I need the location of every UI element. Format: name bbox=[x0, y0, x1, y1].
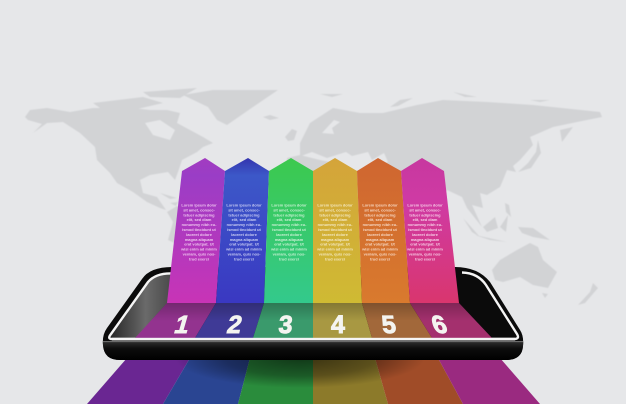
arrow 2 text: elit, sed diam bbox=[232, 217, 257, 222]
panel 4 bbox=[313, 303, 372, 338]
stripe 6 bbox=[438, 358, 540, 404]
number 4: 4 bbox=[331, 311, 345, 339]
panel 3 bbox=[253, 303, 313, 338]
arrow 3 text: veniam, quis nos- bbox=[273, 252, 306, 256]
southeast asia islands bbox=[463, 203, 550, 242]
arrow 1 text: laoreet dolore bbox=[186, 232, 213, 237]
arrow 1 text: tetuer adipiscing bbox=[183, 212, 215, 217]
stripe 1 bbox=[87, 358, 190, 404]
phone shadow on stripes bbox=[175, 328, 425, 388]
arrow 1 bbox=[167, 158, 225, 303]
stripe 3 bbox=[238, 358, 313, 404]
arrow 4 text: Lorem ipsum dolor bbox=[317, 202, 353, 208]
arrow 1 text: wisi enim ad minim bbox=[180, 247, 217, 252]
panel 1 bbox=[135, 303, 216, 338]
arrow 4 text: wisi enim ad minim bbox=[316, 247, 353, 252]
arrow 6 text: sit amet, consec- bbox=[409, 207, 441, 212]
arrow 1 text: ismod tincidunt ut bbox=[182, 227, 217, 232]
arrow 2 text: laoreet dolore bbox=[231, 232, 258, 237]
arrow 5 text: ismod tincidunt ut bbox=[363, 227, 398, 232]
arrow 1 text: veniam, quis nos- bbox=[183, 252, 216, 256]
kamchatka bbox=[560, 127, 573, 142]
smartphone bbox=[100, 267, 526, 360]
arrow 5 bbox=[357, 158, 410, 303]
panel top shading bbox=[150, 303, 476, 321]
left screen area bbox=[108, 273, 171, 338]
arrow 5 text: veniam, quis nos- bbox=[364, 252, 397, 256]
arrow 3 bbox=[264, 158, 313, 303]
phone body bbox=[103, 267, 523, 360]
arrow 3 text: laoreet dolore bbox=[276, 232, 303, 237]
arrow 3 text: trud exerci bbox=[279, 256, 299, 261]
eurasia bbox=[300, 100, 602, 227]
colored floor stripes bbox=[87, 328, 540, 404]
number 5: 5 bbox=[380, 311, 398, 339]
arrow 4 text: ismod tincidunt ut bbox=[318, 227, 353, 232]
arrow 1 text: Lorem ipsum dolor bbox=[181, 202, 217, 208]
number panels on screen bbox=[112, 303, 515, 340]
arrow 4 text: laoreet dolore bbox=[322, 232, 349, 237]
africa bbox=[287, 155, 345, 200]
arrow 4 text: elit, sed diam bbox=[323, 217, 348, 222]
number 3: 3 bbox=[278, 311, 294, 339]
world map bbox=[25, 88, 602, 305]
arrow 5 text: tetuer adipiscing bbox=[364, 212, 396, 217]
arrow 6 text: nonummy nibh eu- bbox=[408, 222, 443, 227]
arrow 5 text: sit amet, consec- bbox=[364, 207, 396, 212]
screen bottom line bbox=[112, 338, 515, 340]
arrow 5 text: erat volutpat. Ut bbox=[365, 242, 396, 247]
arrow 2 text: wisi enim ad minim bbox=[225, 247, 262, 252]
arrow 3 text: Lorem ipsum dolor bbox=[271, 202, 307, 208]
iceland and uk bbox=[263, 115, 297, 141]
arrow 6 text: elit, sed diam bbox=[413, 217, 438, 222]
arrow 6 shape bbox=[401, 158, 459, 303]
arrow 5 text: Lorem ipsum dolor bbox=[362, 202, 398, 208]
arrow 2 shape bbox=[216, 158, 269, 303]
arrow 1 text: sit amet, consec- bbox=[183, 207, 215, 212]
arrow 5 text: nonummy nibh eu- bbox=[363, 222, 398, 227]
arrow 6 text: ismod tincidunt ut bbox=[408, 227, 443, 232]
arrow 5 shape bbox=[357, 158, 410, 303]
south america bbox=[167, 206, 190, 250]
arrow 4 bbox=[313, 158, 362, 303]
arrow 5 text: trud exerci bbox=[370, 256, 390, 261]
number 2: 2 bbox=[225, 311, 245, 339]
arrow 1 text: trud exerci bbox=[189, 256, 209, 261]
arrow 2 text: magna aliquam bbox=[230, 237, 259, 242]
arrow 3 text: tetuer adipiscing bbox=[273, 212, 305, 217]
arrow 6 text: trud exerci bbox=[415, 256, 435, 261]
arrow 4 text: trud exerci bbox=[325, 256, 345, 261]
arrow 2 text: erat volutpat. Ut bbox=[229, 242, 260, 247]
arrow 1 text: elit, sed diam bbox=[187, 217, 212, 222]
arrow 3 text: sit amet, consec- bbox=[273, 207, 305, 212]
hudson bay bbox=[145, 120, 175, 140]
australia bbox=[492, 243, 557, 288]
arrow 4 shape bbox=[313, 158, 362, 303]
arctic islands bbox=[93, 88, 197, 206]
new zealand and tasmania bbox=[542, 283, 598, 305]
mediterranean and black sea bbox=[300, 152, 388, 175]
arrow 2 bbox=[216, 158, 269, 303]
arrow 2 text: sit amet, consec- bbox=[228, 207, 260, 212]
arrow 4 text: erat volutpat. Ut bbox=[320, 242, 351, 247]
north america bbox=[25, 108, 213, 210]
arrow 5 text: elit, sed diam bbox=[368, 217, 393, 222]
arrow 6 text: magna aliquam bbox=[411, 237, 440, 242]
arrow 2 text: veniam, quis nos- bbox=[228, 252, 261, 256]
arrow columns bbox=[167, 158, 459, 303]
arrow 4 text: nonummy nibh eu- bbox=[318, 222, 353, 227]
arrow 3 text: elit, sed diam bbox=[277, 217, 302, 222]
arrow 6 text: Lorem ipsum dolor bbox=[407, 202, 443, 208]
arrow 2 text: nonummy nibh eu- bbox=[227, 222, 262, 227]
number 6: 6 bbox=[428, 312, 451, 339]
number 1: 1 bbox=[171, 311, 193, 339]
arrow 4 text: veniam, quis nos- bbox=[319, 252, 352, 256]
arrow 1 shape bbox=[167, 158, 225, 303]
arrow 5 text: magna aliquam bbox=[366, 237, 395, 242]
baltic sea bbox=[322, 120, 340, 134]
arrow 2 text: Lorem ipsum dolor bbox=[226, 202, 262, 208]
japan bbox=[518, 140, 541, 172]
arrow 4 text: magna aliquam bbox=[321, 237, 350, 242]
arrow 4 text: tetuer adipiscing bbox=[319, 212, 351, 217]
arrow 5 text: wisi enim ad minim bbox=[361, 247, 398, 252]
arrow 3 text: erat volutpat. Ut bbox=[274, 242, 305, 247]
screen outline bbox=[109, 272, 518, 339]
greenland bbox=[183, 90, 278, 125]
arrow 5 text: laoreet dolore bbox=[367, 232, 394, 237]
panel 5 bbox=[362, 303, 432, 338]
arctic russia islands bbox=[320, 92, 550, 107]
stripe 4 bbox=[313, 358, 388, 404]
arrow 6 text: veniam, quis nos- bbox=[409, 252, 442, 256]
arrow 6 text: erat volutpat. Ut bbox=[410, 242, 441, 247]
phone bottom edge bbox=[100, 341, 526, 360]
arrow 3 text: ismod tincidunt ut bbox=[272, 227, 307, 232]
arrow 2 text: trud exerci bbox=[234, 256, 254, 261]
arrow 2 text: tetuer adipiscing bbox=[228, 212, 260, 217]
arrow 3 text: nonummy nibh eu- bbox=[272, 222, 307, 227]
arrow 6 text: tetuer adipiscing bbox=[409, 212, 441, 217]
panel 2 bbox=[195, 303, 264, 338]
stripe 5 bbox=[375, 358, 463, 404]
arrow 4 text: sit amet, consec- bbox=[319, 207, 351, 212]
arrow 1 text: erat volutpat. Ut bbox=[184, 242, 215, 247]
arrow 3 shape bbox=[264, 158, 313, 303]
arrow 1 text: nonummy nibh eu- bbox=[182, 222, 217, 227]
arrow 6 bbox=[401, 158, 459, 303]
arrow 3 text: magna aliquam bbox=[275, 237, 304, 242]
stripe 2 bbox=[163, 358, 250, 404]
numbers bbox=[171, 311, 451, 339]
infographic canvas bbox=[26, 88, 602, 404]
arrow 6 text: wisi enim ad minim bbox=[406, 247, 443, 252]
panel 6 bbox=[410, 303, 492, 338]
arrow 2 text: ismod tincidunt ut bbox=[227, 227, 262, 232]
arrow 1 text: magna aliquam bbox=[185, 237, 214, 242]
arrow 6 text: laoreet dolore bbox=[412, 232, 439, 237]
arrow 3 text: wisi enim ad minim bbox=[270, 247, 307, 252]
